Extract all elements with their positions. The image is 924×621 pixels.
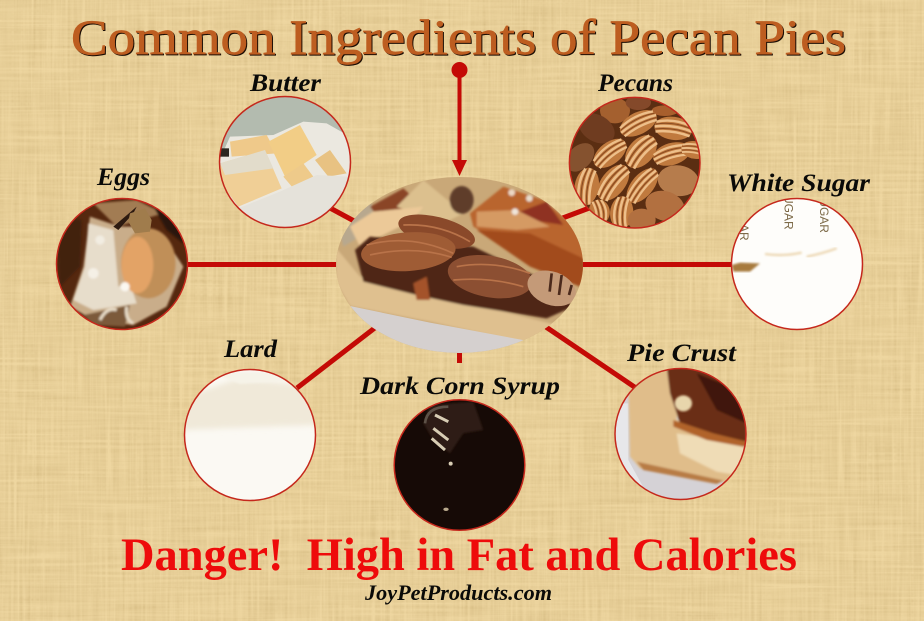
circle outline <box>732 198 862 330</box>
label: Butter: Butter <box>249 70 321 97</box>
title: Common Ingredients of Pecan Pies <box>71 9 846 65</box>
circle outline <box>569 97 700 228</box>
warning headline: Danger! High in Fat and Calories <box>121 529 797 581</box>
pie crust <box>335 237 573 345</box>
photo: pecan nuts <box>570 98 700 228</box>
ingredient: White Sugar <box>727 170 870 330</box>
photo: white sugar: AR <box>737 224 751 241</box>
source credit: JoyPetProducts.com <box>364 580 552 605</box>
photo: white sugar: UGAR <box>781 195 795 230</box>
ingredient: Dark Corn Syrup <box>359 373 560 531</box>
ingredient: Pecans <box>568 74 701 229</box>
label: White Sugar: White Sugar <box>727 170 870 197</box>
plate <box>350 306 524 353</box>
ingredient: Eggs <box>53 164 190 333</box>
photo: dark syrup <box>394 399 526 531</box>
photo: white sugar <box>731 195 863 330</box>
circle outline <box>394 400 525 530</box>
photo: lard <box>180 369 320 501</box>
ingredient: Lard <box>180 336 320 501</box>
arrow: from title to pie <box>452 62 468 176</box>
photo: pie crust closeup <box>613 367 750 503</box>
circle outline <box>220 96 350 228</box>
connector lines to center <box>188 207 732 388</box>
icon: center pecan pie slice <box>336 177 583 353</box>
label: Dark Corn Syrup: Dark Corn Syrup <box>359 373 560 400</box>
pecan halves on the filling <box>361 214 576 306</box>
label: Pie Crust: Pie Crust <box>626 340 737 367</box>
label: Lard: Lard <box>223 336 278 363</box>
circle outline <box>56 198 188 330</box>
label: Eggs: Eggs <box>96 164 150 191</box>
ingredient: Butter <box>217 70 353 233</box>
circle outline <box>184 370 316 500</box>
photo: fried egg <box>53 197 190 333</box>
photo: white sugar: UGAR <box>817 198 831 233</box>
ingredient: Pie Crust <box>613 340 750 503</box>
circle outline <box>615 368 746 500</box>
label: Pecans: Pecans <box>597 70 673 97</box>
photo: butter and flour <box>220 97 350 227</box>
